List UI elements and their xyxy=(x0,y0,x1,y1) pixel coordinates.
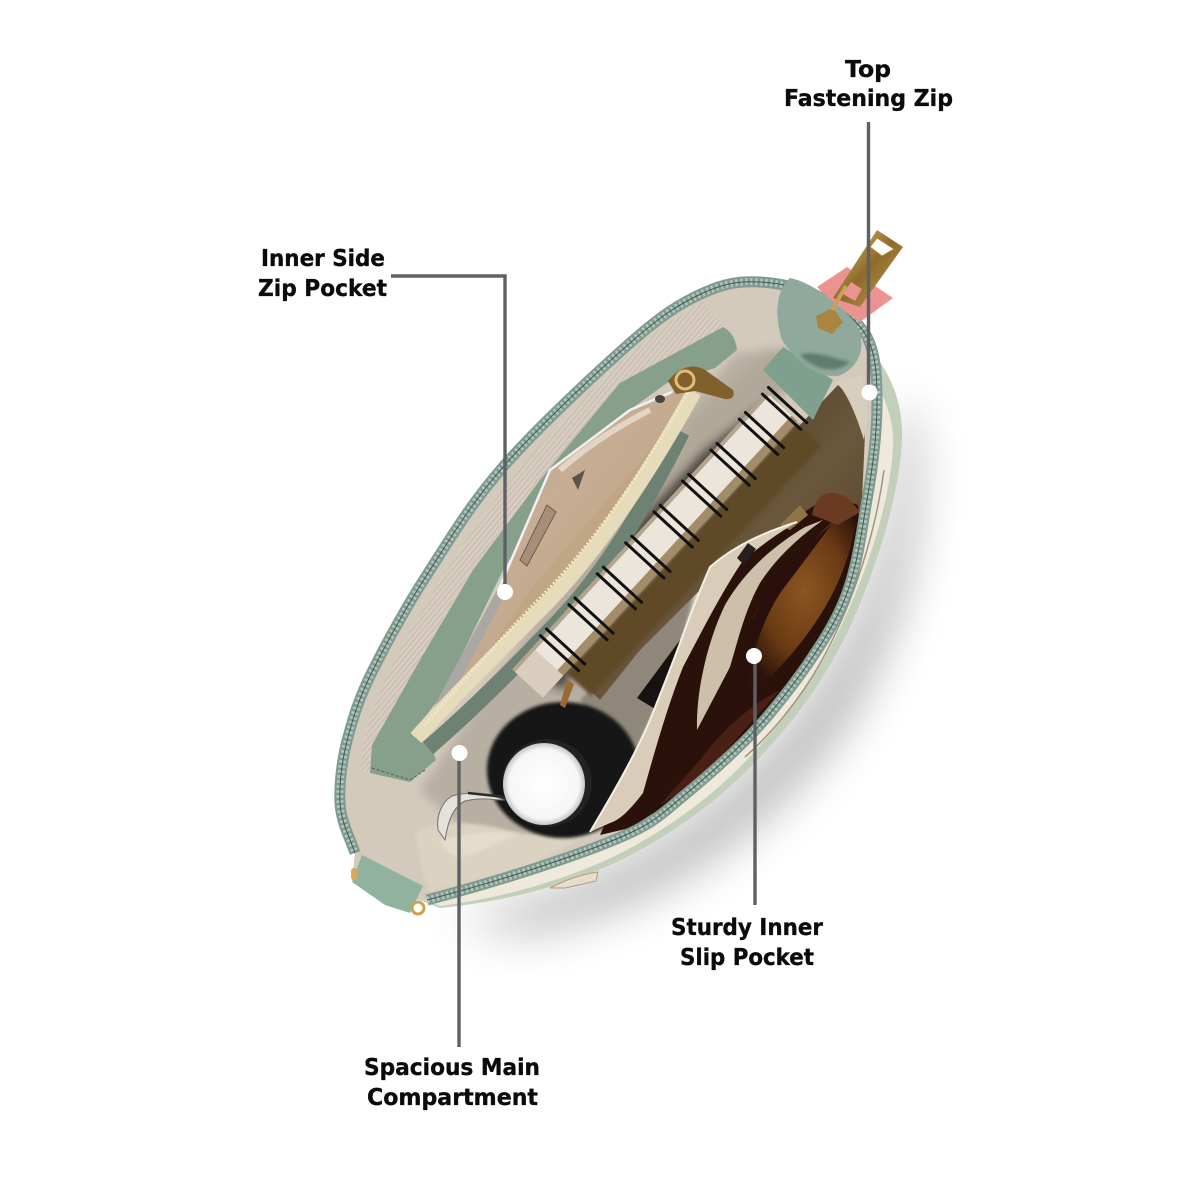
centre shadowed lining xyxy=(420,349,800,845)
bag illustration xyxy=(340,230,917,932)
label text: Sturdy Inner xyxy=(671,915,824,941)
label text xyxy=(671,915,824,971)
pencil stub xyxy=(560,680,574,708)
lining interior xyxy=(340,282,877,900)
label text: Inner Side xyxy=(261,246,385,272)
gold zip pull xyxy=(816,230,903,334)
pocket zip pull xyxy=(655,366,734,403)
spiral rings xyxy=(540,387,807,671)
bottle cap xyxy=(502,739,592,827)
label text: Fastening Zip xyxy=(784,86,953,112)
callout: Inner Side Zip Pocket xyxy=(258,246,513,600)
label text: Slip Pocket xyxy=(680,945,814,971)
marker dot xyxy=(862,384,878,400)
leader line xyxy=(867,122,870,390)
label text xyxy=(258,246,387,302)
pocket dark interior xyxy=(600,495,860,835)
bottle xyxy=(487,702,639,838)
label text xyxy=(784,57,953,112)
label text xyxy=(364,1055,540,1111)
pink zip tab xyxy=(817,267,893,322)
callout: Top Fastening Zip xyxy=(784,57,953,400)
pocket zip tab xyxy=(737,543,756,565)
bag outer body xyxy=(420,350,902,908)
bottom strap tab xyxy=(351,855,424,914)
marker dot xyxy=(452,745,468,761)
label text: Spacious Main xyxy=(364,1055,540,1081)
slip pocket and sunglasses xyxy=(590,493,860,835)
leader line xyxy=(753,658,757,905)
bottom cloth folds xyxy=(415,823,600,892)
pocket zipper tape xyxy=(416,392,694,748)
zip pocket green trim xyxy=(370,327,737,782)
card edge xyxy=(780,505,808,530)
upper lining fabric xyxy=(360,302,723,775)
label text: Top xyxy=(845,57,891,83)
inner beige panel xyxy=(697,520,823,730)
lens xyxy=(740,513,857,687)
leader line xyxy=(391,276,505,590)
main opening zipper xyxy=(340,282,877,900)
dark gap beside notebook xyxy=(530,400,770,690)
notebook xyxy=(511,387,826,721)
front panel xyxy=(590,522,797,832)
right inner shadow zone xyxy=(590,385,866,700)
behind-pocket dark item xyxy=(637,640,690,712)
frame arm xyxy=(660,690,780,805)
marker dot xyxy=(746,648,762,664)
callout: Sturdy Inner Slip Pocket xyxy=(671,648,824,971)
bottom buckle xyxy=(550,872,598,888)
label text: Compartment xyxy=(367,1085,538,1111)
leader line xyxy=(457,755,461,1047)
hang tag xyxy=(438,793,505,840)
tortoise hinge xyxy=(812,493,860,525)
callout: Spacious Main Compartment xyxy=(364,745,540,1111)
drop shadow xyxy=(450,410,917,932)
lining seen below notebook xyxy=(580,570,700,775)
label text: Zip Pocket xyxy=(258,276,387,302)
green zip loop xyxy=(763,278,861,420)
marker dot xyxy=(497,584,513,600)
phone in zip pocket xyxy=(420,385,692,730)
